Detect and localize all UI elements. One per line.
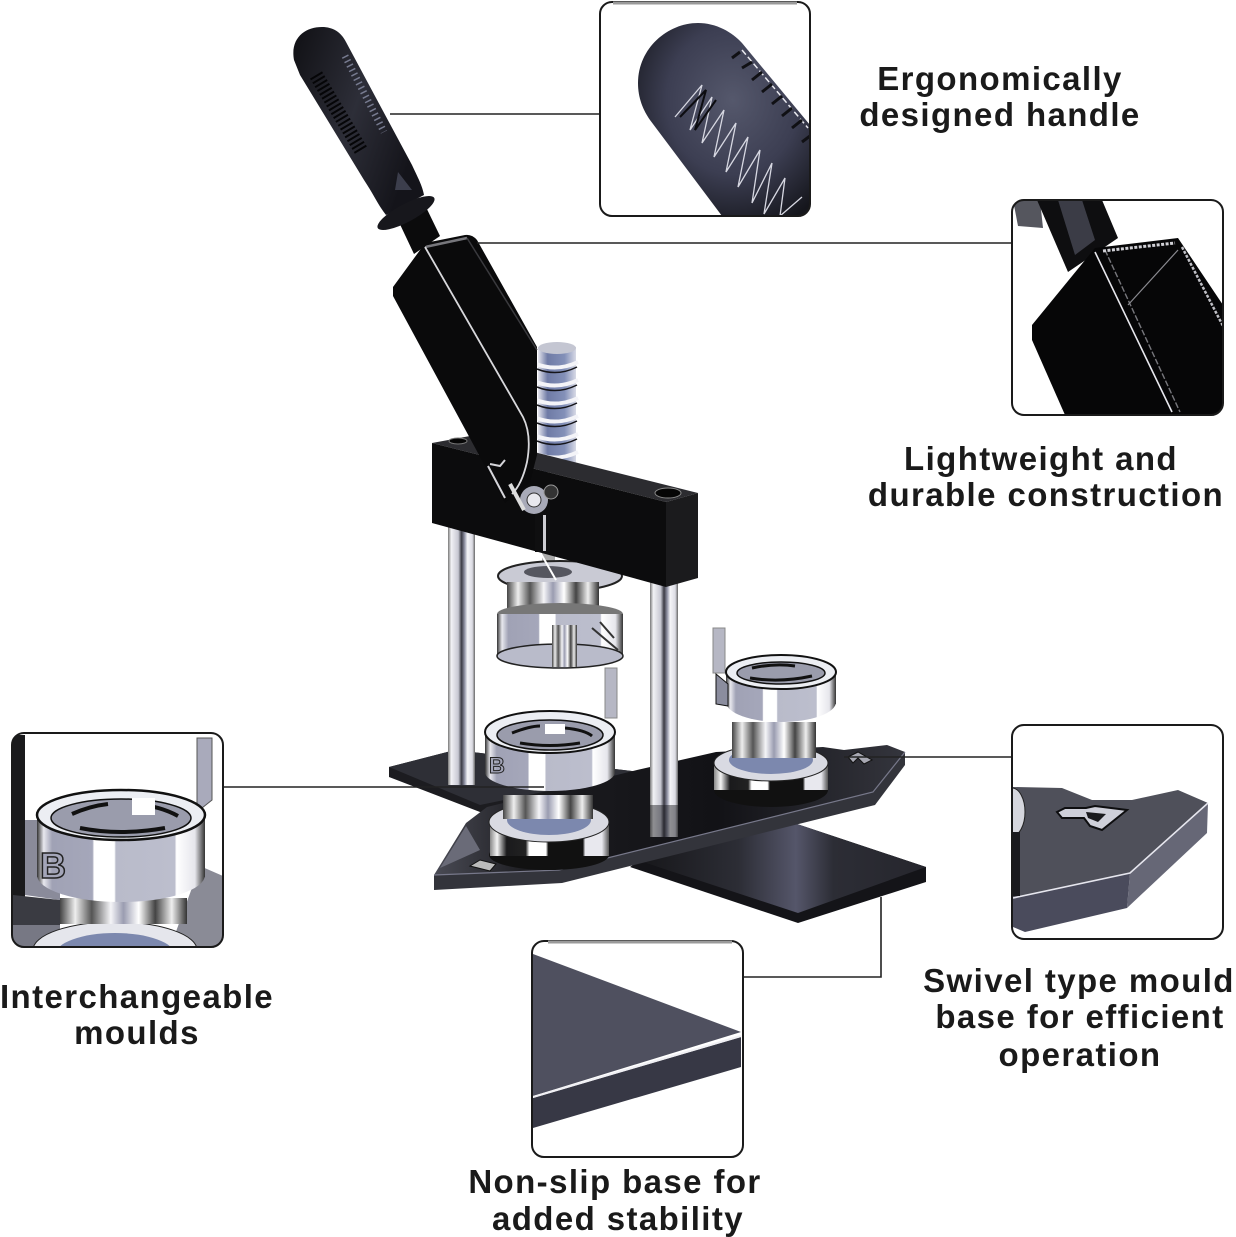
heading: ergonomic handle [859,60,1141,133]
heading: ergonomic handle: Ergonomically [877,60,1123,97]
heading: ergonomic handle: designed handle [859,96,1141,133]
heading: lightweight construction: Lightweight and [904,440,1178,477]
icon: top mould [497,548,623,668]
icon: mould close-up [13,735,222,946]
panel: non-slip base detail [532,941,743,1157]
heading: non-slip base [468,1163,762,1237]
heading: swivel mould base: operation [999,1036,1161,1073]
heading: interchangeable moulds: Interchangeable [0,978,274,1015]
heading: interchangeable moulds [0,978,274,1051]
icon: mould close-up: B [40,845,66,886]
icon: lower mould B [485,668,617,870]
icon: press screw [536,342,578,472]
icon: lever arm [393,235,537,503]
panel: mould detail [11,732,224,948]
heading: swivel mould base: Swivel type mould [923,962,1235,999]
panel: swivel base detail [999,725,1223,939]
panel: construction detail [1012,200,1223,415]
icon: left guide rod [448,523,475,785]
heading: swivel mould base [923,962,1235,1073]
heading: swivel mould base: base for efficient [935,998,1225,1035]
icon: right guide rod [650,580,678,837]
heading: lightweight construction: durable construction [868,476,1224,513]
icon: front base plate [630,822,926,923]
icon: handle close-up [638,23,810,216]
icon: lower mould B: B [489,753,505,778]
icon: lower mould A [713,628,836,807]
icon: base close-up [533,954,741,1128]
icon: swivel mould base [434,745,905,890]
icon: lever socket close-up [1013,200,1223,415]
icon: handle grip [293,27,438,236]
panel: handle detail [600,2,810,216]
icon: handle shaft [397,203,440,254]
icon: crossbar [432,436,698,587]
heading: lightweight construction [868,440,1224,513]
icon: pivot bolt [510,484,558,514]
heading: non-slip base: Non-slip base for [468,1163,762,1200]
leader lines [224,114,1012,977]
heading: non-slip base: added stability [492,1200,744,1237]
badge press machine [293,27,926,923]
icon: swivel base close-up [999,787,1208,932]
heading: interchangeable moulds: moulds [74,1014,200,1051]
icon: rear base plate [389,750,640,820]
